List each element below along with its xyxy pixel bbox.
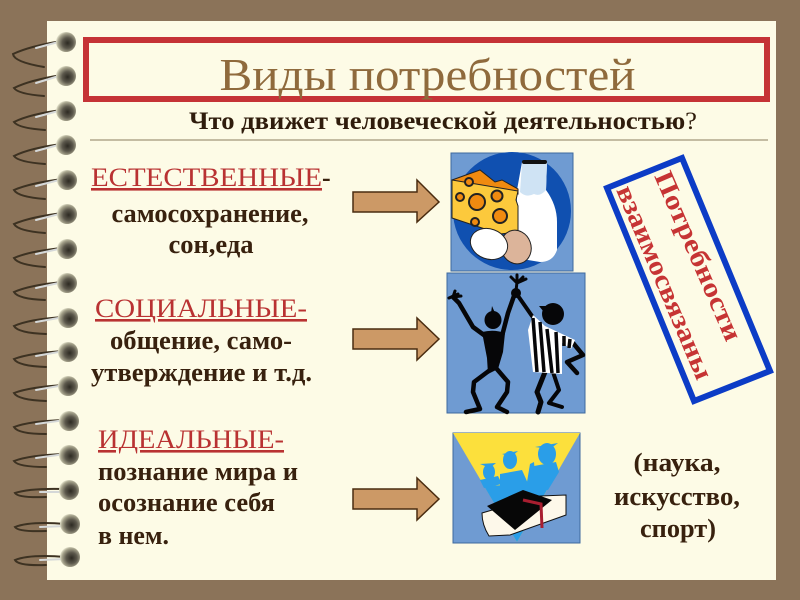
text block: ideal needs xyxy=(98,425,298,550)
arrow 1 xyxy=(353,180,439,222)
text block: natural needs: - xyxy=(322,163,331,192)
callout: needs are interconnected: взаимосвязаны xyxy=(610,181,719,384)
text block: social needs: общение, само- xyxy=(110,326,292,355)
text block: examples: спорт) xyxy=(640,514,716,543)
text block: social needs: СОЦИАЛЬНЫЕ- xyxy=(95,294,307,323)
text block: examples xyxy=(614,448,740,543)
title: Виды потребностей xyxy=(220,49,636,100)
text block: examples: (наука, xyxy=(634,448,720,477)
callout: needs are interconnected xyxy=(607,158,770,401)
text block: social needs xyxy=(91,294,312,387)
text block: ideal needs: осознание себя xyxy=(98,488,275,517)
title frame xyxy=(86,40,767,99)
spiral binding xyxy=(13,32,80,567)
icon: two dancing people xyxy=(447,273,585,413)
icon: graduation xyxy=(453,433,580,543)
text block: social needs: утверждение и т.д. xyxy=(91,358,312,387)
text block: ideal needs: в нем. xyxy=(98,521,169,550)
text block: natural needs xyxy=(91,163,331,259)
icon: food xyxy=(451,152,573,271)
text block: natural needs: ЕСТЕСТВЕННЫЕ xyxy=(91,163,322,192)
text block: examples: искусство, xyxy=(614,482,740,511)
arrow 2 xyxy=(353,318,439,360)
text block: ideal needs: ИДЕАЛЬНЫЕ- xyxy=(98,425,284,454)
arrow 3 xyxy=(353,478,439,520)
text block: natural needs: сон,еда xyxy=(168,230,254,259)
text block: ideal needs: познание мира и xyxy=(98,457,298,486)
subtitle question: Что движет человеческой деятельностью ? xyxy=(189,108,697,135)
text block: natural needs: самосохранение, xyxy=(112,199,308,228)
callout: needs are interconnected: Потребности xyxy=(648,166,749,345)
